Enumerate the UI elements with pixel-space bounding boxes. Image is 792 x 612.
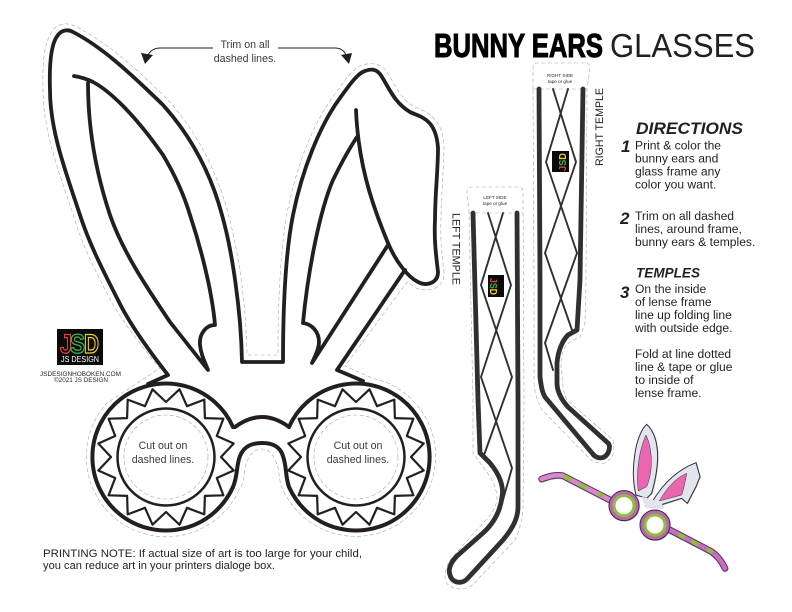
- right tab label: [547, 73, 573, 84]
- step 1: color you want.: [635, 178, 716, 192]
- step 3: to inside of: [635, 373, 694, 387]
- JS Design logo: S: [70, 329, 85, 359]
- left lens: Cut out on: [139, 440, 188, 452]
- step 1: bunny ears and: [635, 152, 718, 166]
- dashed trim line around frame and ears: [43, 24, 444, 537]
- step 2: 2: [619, 209, 630, 228]
- step 2: lines, around frame,: [635, 222, 742, 236]
- temples heading: TEMPLES: [636, 266, 700, 280]
- trim callout with arrows: [141, 39, 352, 65]
- trim callout with arrows: dashed lines.: [214, 53, 276, 65]
- step 3: 3: [620, 283, 630, 302]
- left tab label: LEFT SIDE: [483, 195, 507, 200]
- directions: DIRECTIONS: [636, 120, 743, 138]
- step 1: [621, 137, 721, 192]
- left lens: dashed lines.: [132, 454, 194, 466]
- step 3: line & tape or glue: [635, 360, 733, 374]
- title: GLASSES: [610, 27, 755, 64]
- right temple logo: JSD: [558, 153, 569, 171]
- right temple: [533, 63, 614, 463]
- step 3: Fold at line dotted: [635, 347, 731, 361]
- glasses frame: [92, 383, 430, 530]
- left tab label: tape or glue: [483, 201, 508, 206]
- ear outlines: [50, 30, 438, 384]
- step 3: lense frame.: [635, 386, 702, 400]
- mini ears: [633, 424, 658, 498]
- mini lenses: [609, 491, 639, 521]
- left temple logo: J S D: [487, 278, 498, 295]
- title: [434, 27, 755, 64]
- logo credit text: ©2021 JS DESIGN: [54, 377, 108, 384]
- mini temples: [542, 475, 610, 500]
- left lens: [98, 389, 234, 525]
- step 3: of lense frame: [635, 295, 712, 309]
- right temple label: RIGHT TEMPLE: [594, 88, 606, 166]
- step 2: [619, 209, 755, 249]
- right lens: [288, 389, 424, 525]
- step 1: glass frame any: [635, 164, 721, 178]
- printing note: PRINTING NOTE: If actual size of art is too large for your child,: [43, 548, 362, 560]
- bunny ears and glasses cut-out: [43, 24, 444, 537]
- step 3: line up folding line: [635, 308, 732, 322]
- logo credit text: JSDESIGNHOBOKEN.COM: [40, 371, 121, 378]
- directions: [619, 120, 755, 400]
- step 2: bunny ears & temples.: [635, 235, 755, 249]
- step 3: On the inside: [635, 282, 707, 296]
- right temple logo: [552, 151, 569, 172]
- title: BUNNY EARS: [434, 27, 603, 64]
- JS Design logo: [57, 329, 103, 365]
- step 2: Trim on all dashed: [635, 209, 734, 223]
- left temple label: LEFT TEMPLE: [450, 213, 462, 285]
- JS Design logo: J: [60, 329, 72, 359]
- printing note: [43, 548, 362, 572]
- logo credit text: [40, 371, 121, 384]
- step 3: with outside edge.: [634, 321, 732, 335]
- printing note: you can reduce art in your printers dialoge box.: [43, 560, 275, 572]
- step 1: Print & color the: [635, 138, 721, 152]
- right tab label: RIGHT SIDE: [547, 73, 573, 78]
- JS Design logo: JS DESIGN: [61, 355, 99, 364]
- right ear inner lines: [303, 137, 388, 363]
- right lens: Cut out on: [334, 440, 383, 452]
- finished glasses illustration: [542, 424, 725, 568]
- right tab label: tape or glue: [548, 79, 573, 84]
- left temple: [445, 187, 524, 589]
- step 1: 1: [621, 137, 630, 156]
- trim callout with arrows: Trim on all: [220, 39, 270, 51]
- JS Design logo: D: [84, 329, 99, 359]
- left temple logo: [487, 275, 504, 297]
- mini temple diamonds: [563, 476, 713, 552]
- step 3: [620, 282, 733, 400]
- left inner ear: [74, 76, 215, 370]
- right lens: dashed lines.: [327, 454, 389, 466]
- left tab label: [483, 195, 508, 206]
